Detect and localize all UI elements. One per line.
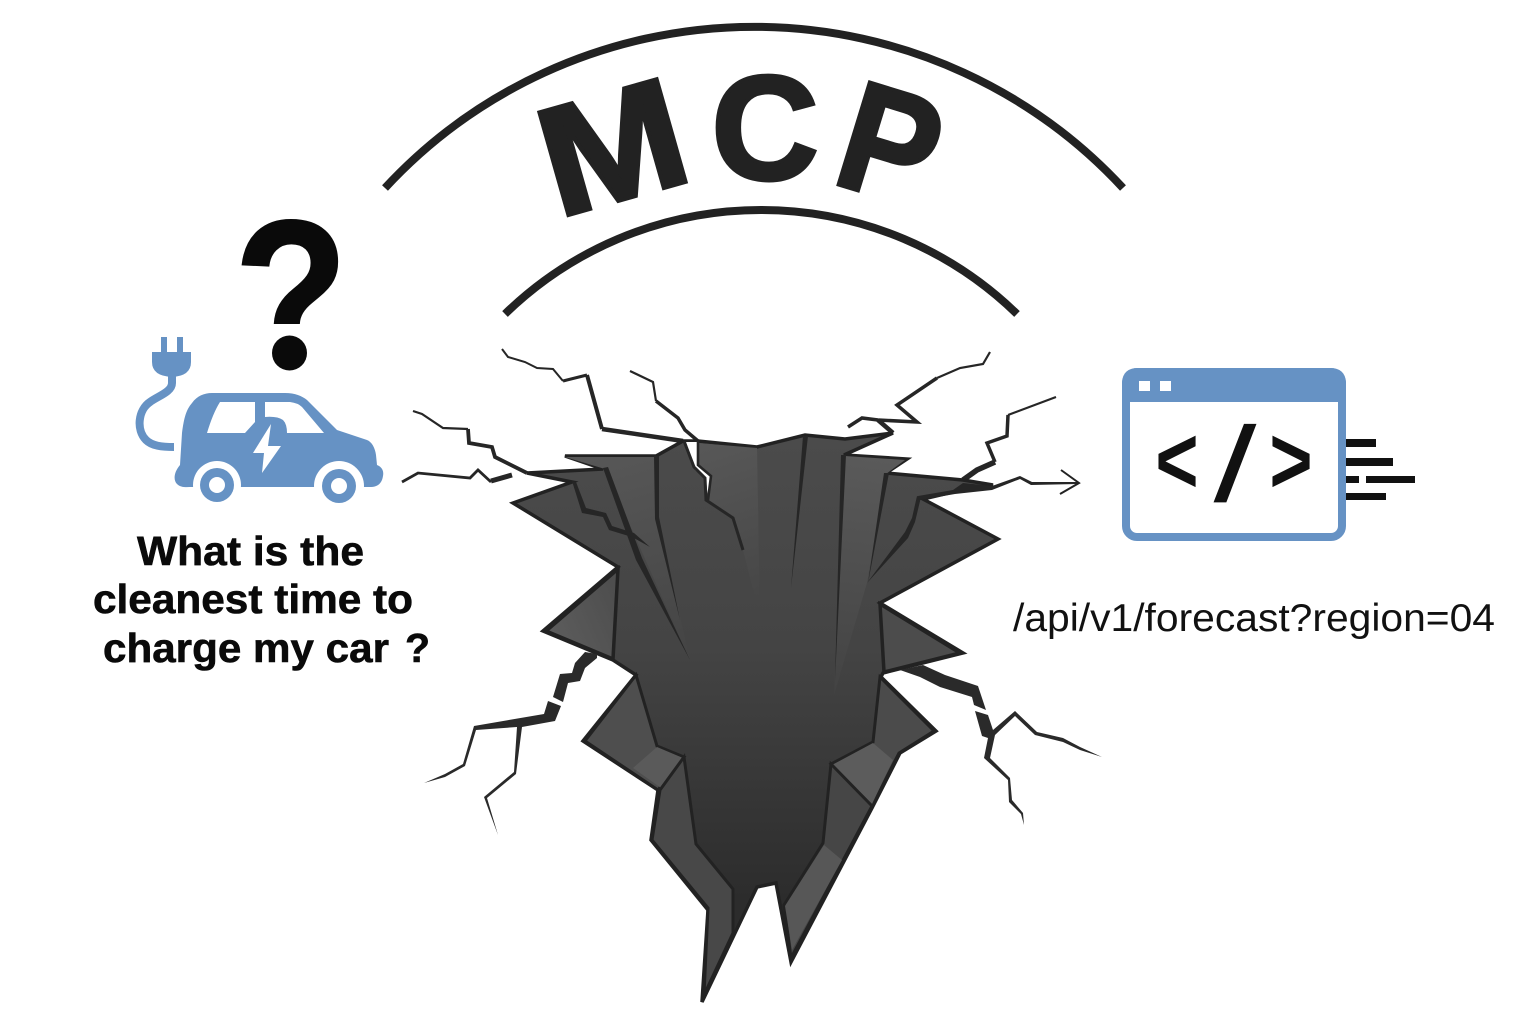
facet: centre light	[698, 443, 760, 617]
rear wheel	[314, 461, 364, 511]
central fissure	[684, 441, 743, 550]
car body	[175, 393, 383, 487]
window frame	[1126, 372, 1342, 537]
crack: far left upper	[413, 411, 527, 473]
crack: lower right	[900, 665, 1102, 825]
plug	[152, 337, 191, 377]
title: MCP: M	[519, 44, 706, 250]
crack: top left long	[502, 349, 683, 441]
facet: left triangle	[546, 569, 618, 659]
question text	[93, 528, 430, 671]
facet: lower right upper	[831, 677, 934, 806]
window buttons	[1139, 381, 1171, 391]
hole	[513, 433, 998, 1002]
crack: far left lower	[402, 470, 512, 482]
title: MCP: P	[820, 47, 961, 241]
code brackets: <	[1155, 407, 1199, 514]
title bar	[1122, 368, 1346, 402]
title: MCP	[519, 44, 961, 250]
question text: ?	[405, 625, 430, 671]
car windows	[207, 402, 324, 433]
code brackets: /	[1214, 405, 1257, 524]
facet: lower right tip highlight	[785, 845, 842, 950]
facet: right triangle	[880, 604, 960, 672]
crack: top right	[848, 352, 990, 433]
outer arc	[385, 27, 1123, 188]
title: MCP: C	[712, 46, 818, 211]
facet: lower right long	[784, 764, 872, 958]
code brackets	[1155, 405, 1313, 524]
question text: What is the	[137, 528, 364, 574]
crack: arrow to API	[918, 470, 1079, 500]
crack network	[402, 349, 1056, 482]
facet: upper left light	[565, 457, 690, 660]
facet: lower left highlight	[633, 747, 683, 788]
facet: lower left upper	[585, 675, 684, 790]
facet: lower right highlight	[832, 743, 893, 804]
icon: code window	[1122, 368, 1415, 537]
speed lines	[1346, 439, 1415, 500]
crack: right upper	[963, 397, 1056, 480]
question text: cleanest time to	[93, 576, 413, 622]
crack: top left short	[630, 371, 698, 441]
inner arc	[505, 210, 1017, 314]
code brackets: >	[1269, 407, 1313, 514]
facet: upper right light	[834, 456, 905, 695]
lightning bolt	[253, 424, 281, 473]
facet: lower left long	[652, 757, 733, 995]
API endpoint label: /api/v1/forecast?region=04	[1013, 597, 1495, 640]
front wheel	[193, 461, 241, 509]
icon: electric car with plug	[140, 337, 383, 511]
hole outline	[513, 433, 998, 1002]
charging cable	[140, 375, 174, 447]
question text: charge my car	[103, 625, 389, 671]
inner fracture lines	[572, 436, 921, 680]
crack: lower left	[424, 652, 597, 835]
icon: question mark: ?	[234, 177, 348, 414]
